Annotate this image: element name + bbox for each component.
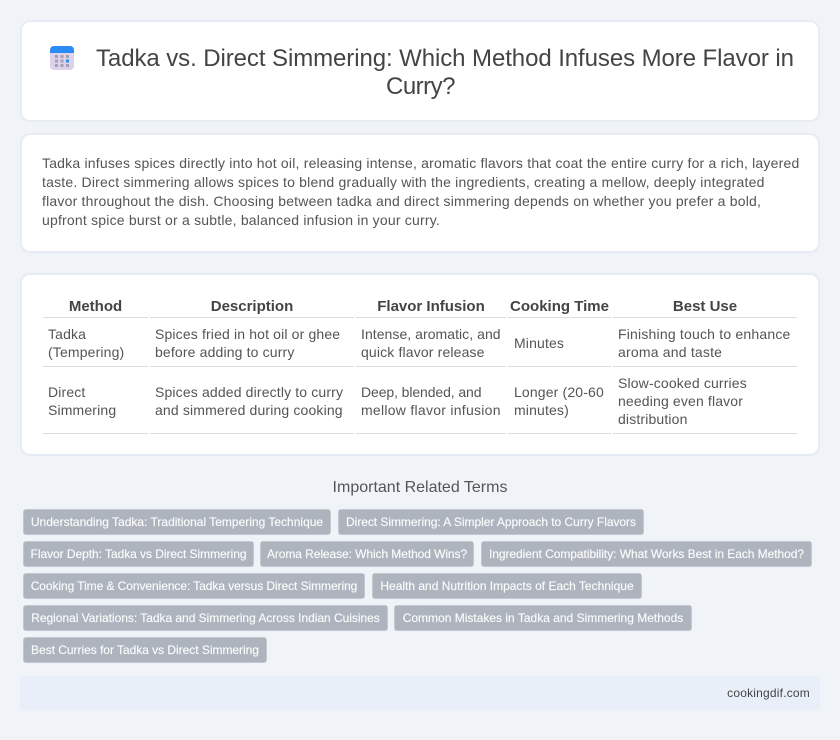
row 1: method: Tadka: [48, 326, 86, 342]
row 1: method: (Tempering): [48, 344, 124, 360]
text block: intro: upfront spice burst or a subtle, balanced infusion in your curry.: [42, 212, 440, 228]
row 2: cooking time: minutes): [514, 402, 569, 418]
icon: calendar: [50, 46, 74, 70]
row 2: flavor infusion: mellow flavor infusion: [361, 402, 501, 418]
tag: [23, 605, 388, 631]
row 2: best use: needing even flavor: [618, 393, 743, 409]
tag: [394, 605, 692, 631]
row 2: method: Simmering: [48, 402, 116, 418]
tag: [481, 541, 812, 567]
tags: related terms: [23, 509, 812, 663]
tag: [260, 541, 474, 567]
table header: flavor infusion: Flavor Infusion: [377, 298, 485, 315]
row 1: cooking time: Minutes: [514, 335, 564, 351]
row 2: method: [48, 384, 116, 418]
tag: Aroma Release: Which Method Wins?: [267, 547, 467, 561]
table header: cooking time: Cooking Time: [510, 298, 609, 315]
tag: Best Curries for Tadka vs Direct Simmering: [31, 643, 259, 657]
tag: Health and Nutrition Impacts of Each Technique: [380, 579, 634, 593]
row 2: description: [155, 384, 343, 418]
row 2: flavor infusion: Deep, blended, and: [361, 384, 481, 400]
heading: important related terms: Important Related Terms: [333, 479, 507, 496]
table header: description: Description: [211, 298, 293, 315]
row 1: best use: [618, 326, 791, 360]
text block: intro: Tadka infuses spices directly into hot oil, releasing intense, aromatic flavors that coat the entire curry for a rich, layered: [42, 154, 799, 170]
row 1: flavor infusion: quick flavor release: [361, 344, 485, 360]
row 2: best use: [618, 375, 747, 427]
row 2: cooking time: [514, 384, 604, 418]
tag: [23, 637, 267, 663]
tag: [372, 573, 642, 599]
row 1: best use: aroma and taste: [618, 344, 722, 360]
row 2: description: Spices added directly to curry: [155, 384, 343, 400]
tag: Common Mistakes in Tadka and Simmering Methods: [403, 611, 683, 625]
tag: Direct Simmering: A Simpler Approach to Curry Flavors: [346, 515, 636, 529]
tag: [23, 541, 254, 567]
tag: Cooking Time & Convenience: Tadka versus Direct Simmering: [31, 579, 357, 593]
row 1: flavor infusion: [361, 326, 501, 360]
tag: Flavor Depth: Tadka vs Direct Simmering: [31, 547, 246, 561]
row 1: description: Spices fried in hot oil or ghee: [155, 326, 340, 342]
panel: intro: [20, 133, 820, 253]
footer: [20, 676, 820, 710]
table header: method: Method: [69, 298, 122, 315]
table header: best use: Best Use: [673, 298, 737, 315]
footer: source: cookingdif.com: [727, 686, 810, 700]
text block: intro: [42, 154, 799, 228]
heading: title: Tadka vs. Direct Simmering: Which Method Infuses More Flavor in: [96, 45, 794, 72]
tag: [23, 509, 331, 535]
heading: title: Curry?: [386, 73, 455, 100]
row 1: best use: Finishing touch to enhance: [618, 326, 791, 342]
row 2: method: Direct: [48, 384, 85, 400]
row 1: description: before adding to curry: [155, 344, 294, 360]
tag: Understanding Tadka: Traditional Tempering Technique: [31, 515, 323, 529]
row 2: cooking time: Longer (20-60: [514, 384, 604, 400]
row 2: description: and simmered during cooking: [155, 402, 343, 418]
row 2: best use: distribution: [618, 411, 688, 427]
row 2: best use: Slow-cooked curries: [618, 375, 747, 391]
row 1: description: [155, 326, 340, 360]
panel: title: [20, 20, 820, 122]
panel: comparison table: [20, 273, 820, 456]
tag: [338, 509, 644, 535]
row 2: flavor infusion: [361, 384, 501, 418]
tag: Ingredient Compatibility: What Works Best in Each Method?: [489, 547, 804, 561]
text block: intro: taste. Direct simmering allows spices to blend gradually with the ingredients, creating a mellow, deeply integrated: [42, 174, 765, 190]
row 1: method: [48, 326, 124, 360]
row 1: flavor infusion: Intense, aromatic, and: [361, 326, 501, 342]
text block: intro: flavor throughout the dish. Choosing between tadka and direct simmering depends on whether you prefer a bold,: [42, 193, 761, 209]
tag: Regional Variations: Tadka and Simmering Across Indian Cuisines: [31, 611, 380, 625]
tag: [23, 573, 365, 599]
heading: title: [96, 45, 794, 100]
